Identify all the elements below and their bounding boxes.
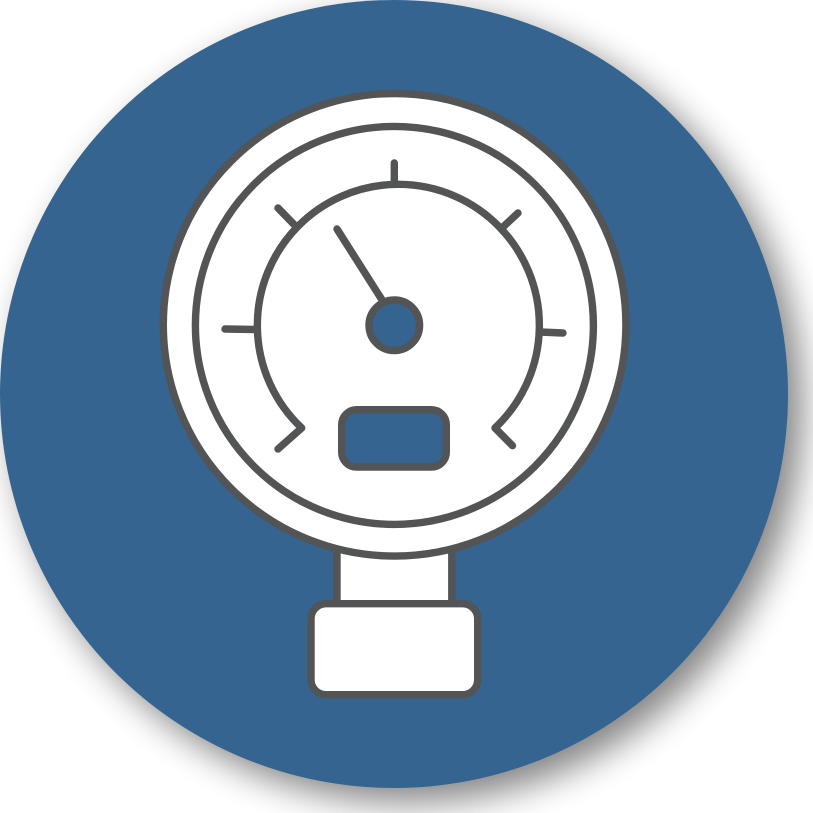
icon: pressure gauge (163, 93, 626, 695)
dial ticks (225, 163, 563, 333)
display window (342, 410, 446, 467)
gauge inner ring (195, 126, 593, 524)
needle hub (369, 300, 420, 351)
gauge stem (337, 540, 452, 604)
gauge needle (337, 229, 384, 303)
dial arc with bottom hooks (257, 184, 539, 449)
gauge outer body (163, 93, 626, 556)
gauge base (311, 604, 478, 695)
